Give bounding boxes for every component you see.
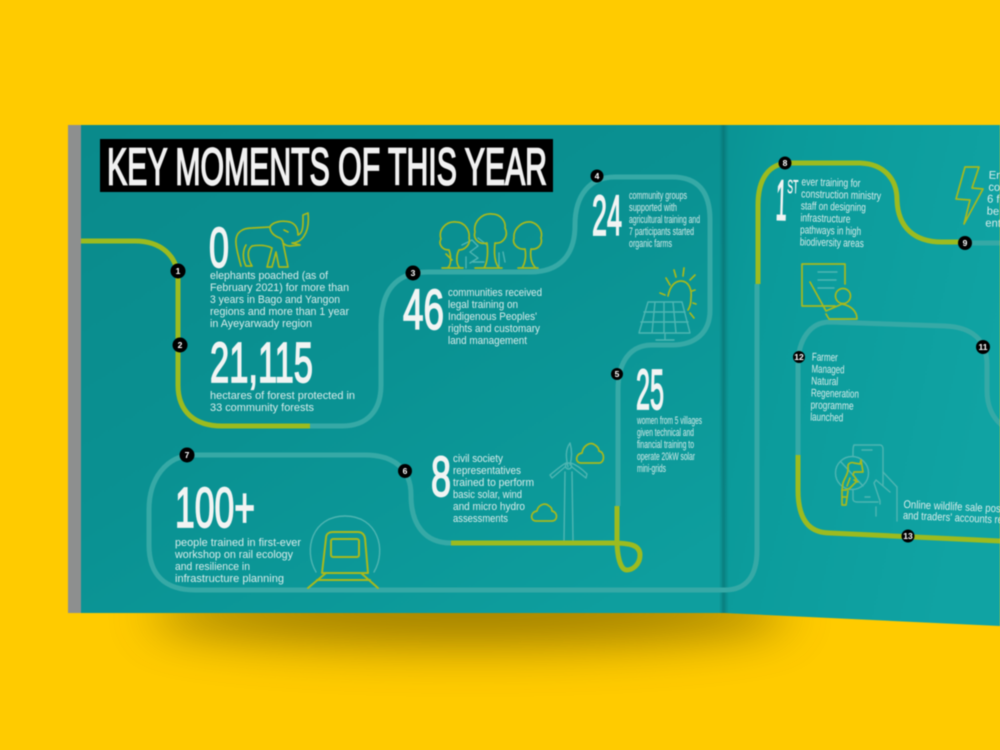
text: farmer managed natural regeneration: Natural [811, 376, 838, 388]
stat: 8 representatives: assessments [453, 513, 508, 525]
icon: wind turbine and clouds [532, 443, 604, 540]
stat: 8 representatives: 8 [431, 445, 451, 509]
icon: trees [440, 214, 542, 268]
marker 3 [406, 266, 420, 280]
icon: teacher at board [802, 264, 857, 319]
icon: solar panel and sun [639, 268, 696, 340]
stat: 1st training: staff on designing [801, 200, 866, 214]
title: KEY MOMENTS OF THIS YEAR [107, 138, 547, 196]
stat: 46 communities: rights and customary [448, 323, 540, 335]
stat: 21,115 hectares: hectares of forest protected in [210, 390, 355, 402]
stat: 8 representatives: basic solar, wind [453, 489, 522, 501]
marker 8: 8 [783, 158, 788, 168]
stat: 24 community groups: community groups [629, 190, 687, 202]
marker 5: 5 [615, 369, 620, 379]
marker 7: 7 [185, 450, 190, 460]
stat: 100+ people [174, 476, 301, 585]
marker 11: 11 [978, 342, 988, 352]
stat: 24 community groups [592, 184, 700, 250]
marker 4: 4 [595, 171, 600, 181]
marker 9: 9 [963, 238, 968, 248]
partial energy text: 6 f [987, 194, 1000, 206]
title [100, 138, 553, 196]
stat: 25 women [636, 358, 702, 475]
stat: 8 representatives: representatives [453, 465, 521, 477]
marker 9 [958, 236, 972, 250]
stat: 8 representatives: and micro hydro [453, 501, 525, 513]
stat: 1st training [775, 169, 882, 251]
stat: 0 elephants: elephants poached (as of [210, 270, 329, 282]
text: farmer managed natural regeneration: Regeneration [811, 388, 859, 401]
stat: 1st training: infrastructure [800, 212, 851, 226]
marker 7 [180, 448, 194, 462]
left page [68, 125, 724, 613]
stat: 46 communities: Indigenous Peoples' [448, 311, 537, 323]
marker 1 [170, 264, 186, 278]
stat: 25 women: given technical and [637, 427, 694, 439]
marker 13 [902, 530, 914, 542]
stat: 21,115 hectares: 33 community forests [210, 402, 314, 414]
stat: 100+ people: 100+ [175, 476, 255, 540]
stat: 25 women: 25 [636, 358, 664, 422]
stat: 21,115 hectares [210, 331, 355, 414]
stat: 24 community groups: 7 participants started [629, 226, 694, 238]
marker 1: 1 [176, 266, 181, 276]
marker 6 [398, 464, 412, 478]
text: farmer managed natural regeneration: Farmer [812, 352, 838, 364]
marker 12: 12 [794, 352, 804, 362]
stat: 0 elephants: February 2021) for more than [210, 282, 349, 294]
stat: 46 communities: communities received [448, 287, 542, 299]
stat: 1st training: construction ministry [801, 188, 882, 203]
partial energy text: be [987, 206, 999, 218]
stat: 0 elephants: regions and more than 1 year [210, 306, 349, 318]
book spread [68, 125, 1000, 626]
stat: 0 elephants: 0 [209, 216, 229, 280]
stat: 46 communities: legal training on [448, 299, 518, 311]
marker 4 [590, 170, 604, 182]
stat: 8 representatives: civil society [453, 453, 503, 465]
stat: 46 communities [403, 278, 542, 347]
icon: phone with bird [836, 445, 897, 521]
stat: 8 representatives [431, 445, 534, 525]
marker 5 [611, 368, 623, 380]
icon: lightning bolt [956, 167, 983, 224]
stat: 100+ people: workshop on rail ecology [174, 549, 293, 561]
icon: train [308, 516, 380, 588]
text: farmer managed natural regeneration: programme [810, 399, 854, 413]
stat: 24 community groups: 24 [592, 184, 622, 248]
stat: 46 communities: land management [448, 335, 528, 347]
stat: 24 community groups: organic farms [629, 238, 672, 250]
stat: 100+ people: people trained in first-ever [175, 537, 301, 549]
marker 2: 2 [178, 340, 183, 350]
stat: 21,115 hectares: 21,115 [210, 331, 313, 395]
stat: 1st training: ever training for [801, 176, 861, 190]
marker 12 [793, 351, 805, 363]
text: farmer managed natural regeneration [810, 352, 860, 425]
marker 6: 6 [403, 466, 408, 476]
route line [81, 163, 1000, 590]
marker 2 [172, 338, 188, 352]
stat: 24 community groups: agricultural training and [629, 214, 700, 226]
marker 3: 3 [411, 268, 416, 278]
spine edge [68, 125, 81, 613]
stat: 0 elephants: in Ayeyarwady region [210, 318, 312, 330]
marker 8 [778, 156, 792, 170]
stat: 1st training: pathways in high [800, 224, 861, 238]
stat: 1st training: biodiversity areas [800, 236, 864, 250]
stat: 100+ people: and resilience in [175, 561, 250, 573]
stat: 0 elephants [209, 213, 349, 330]
right page content [775, 164, 1000, 254]
stat: 1st training: 1 [775, 169, 788, 233]
right page [724, 125, 1000, 626]
marker 11 [976, 340, 990, 354]
stat: 0 elephants: 3 years in Bago and Yangon [210, 294, 340, 306]
stat: 25 women: financial training to [637, 439, 694, 451]
stat: 24 community groups: supported with [629, 202, 677, 214]
icon: elephant [236, 213, 308, 267]
text: farmer managed natural regeneration: launched [810, 411, 843, 424]
stat: 8 representatives: trained to perform [453, 477, 534, 489]
stat: 25 women: women from 5 villages [636, 415, 702, 427]
text: online wildlife sale posts [903, 499, 1000, 526]
centre fold [719, 125, 729, 613]
stat: 25 women: operate 20kW solar [637, 451, 695, 463]
stat: 46 communities: 46 [403, 278, 444, 342]
text: farmer managed natural regeneration: Managed [811, 364, 845, 376]
book shadow [150, 584, 790, 644]
marker 13: 13 [903, 531, 913, 541]
partial energy text [985, 170, 1000, 230]
stat: 100+ people: infrastructure planning [175, 573, 284, 585]
stat: 1st training: ST [787, 177, 799, 198]
numbered markers [170, 156, 990, 542]
stat: 25 women: mini-grids [637, 463, 666, 475]
